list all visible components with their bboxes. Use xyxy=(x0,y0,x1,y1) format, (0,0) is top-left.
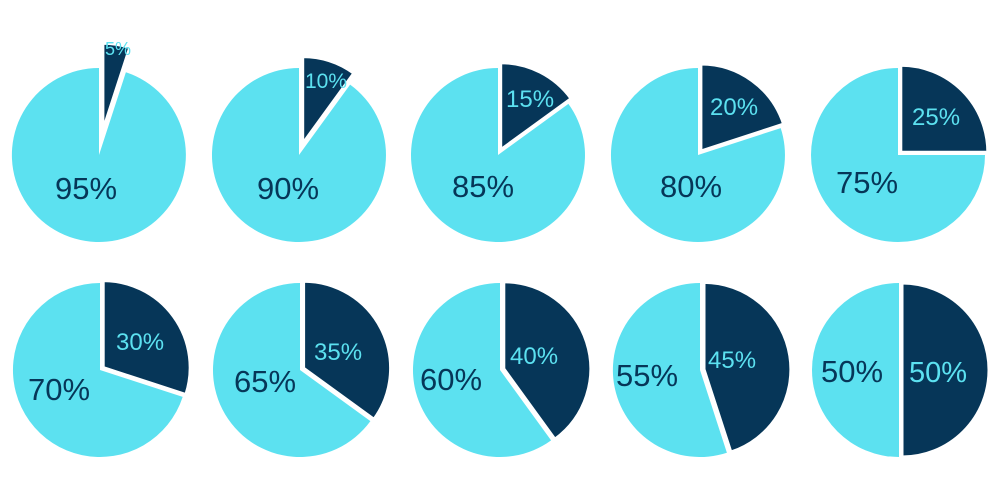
pie: 70/30: 30% xyxy=(116,329,164,356)
pie: 80/20: 80% xyxy=(660,169,722,204)
pie: 55/45: 55% xyxy=(616,358,678,393)
pie: 60/40: 60% xyxy=(420,362,482,397)
pie: 70/30 xyxy=(13,281,190,457)
pie: 65/35 xyxy=(213,281,391,457)
pie: 75/25 xyxy=(811,65,988,242)
pie: 95/5: 95% xyxy=(55,171,117,206)
pie: 95/5: 5% xyxy=(105,39,131,59)
pie: 90/10 xyxy=(212,57,386,242)
pie: 80/20: 20% xyxy=(710,94,758,121)
pie: 85/15: 85% xyxy=(452,169,514,204)
pie: 55/45: 45% xyxy=(708,347,756,374)
pie: 60/40: 40% xyxy=(510,343,558,370)
pie: 75/25: 75% xyxy=(836,165,898,200)
pie: 65/35: 65% xyxy=(234,364,296,399)
pie: 75/25: 25% xyxy=(912,104,960,131)
pie: 70/30: 70% xyxy=(28,372,90,407)
pie: 95/5 xyxy=(12,39,186,242)
pie: 65/35: 35% xyxy=(314,339,362,366)
pie: 90/10: 10% xyxy=(305,70,347,93)
pie: 50/50: 50% xyxy=(909,357,967,389)
pie: 80/20 xyxy=(611,64,785,242)
pie: 90/10: 90% xyxy=(257,171,319,206)
pie: 55/45 xyxy=(613,282,791,457)
pie: 60/40 xyxy=(413,282,591,457)
pie: 85/15 xyxy=(411,63,585,242)
pie: 50/50 xyxy=(812,283,989,457)
pie: 50/50: 50% xyxy=(821,354,883,389)
pie: 85/15: 15% xyxy=(506,86,554,113)
